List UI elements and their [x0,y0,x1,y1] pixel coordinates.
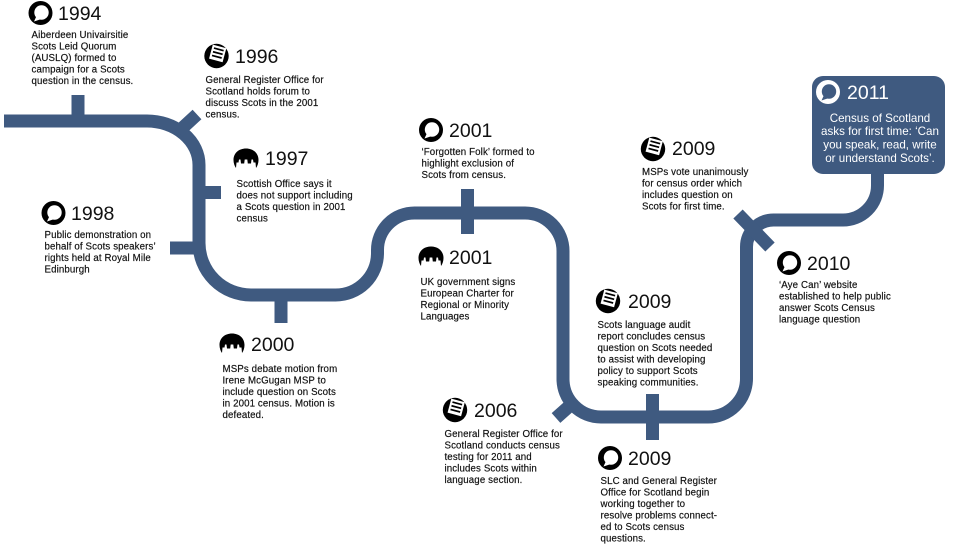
event 2009 SLC: 2009 [628,448,671,470]
event 2000: MSPs debate motion from [222,364,337,375]
icon: crowd 2001 [418,246,444,266]
event 2009 vote: includes question on [642,190,733,201]
event 2010 [777,251,891,326]
event 1996: 1996 [235,46,278,68]
event 2009 audit: speaking communities. [598,378,699,388]
event 2009 SLC: working together to [600,499,685,510]
event 2006: language section. [444,475,522,486]
event 2006: Scotland conducts census [444,440,560,452]
event 1997: census [236,214,268,224]
event 2000: defeated. [222,410,264,421]
icon: speech bubble 1998 [42,201,66,225]
timeline path [4,95,878,440]
event 2001 European Charter: European Charter for [420,288,515,300]
event 1998: behalf of Scots speakers’ [44,242,156,252]
icon: crowd 1997 [234,148,258,168]
event 1997: a Scots question in 2001 [236,202,345,213]
event 1998 [42,201,156,276]
event 2009 audit: Scots language audit [598,320,691,331]
event 1998: Public demonstration on [44,230,151,241]
event 2000 [220,334,337,421]
event 2009 SLC: resolve problems connect- [600,510,717,522]
event 1997: Scottish Office says it [236,179,332,190]
event 1994 [28,1,133,87]
icon: document 2009 audit [596,289,620,313]
event 2006: testing for 2011 and [444,452,532,463]
event 2009 SLC: ed to Scots census [600,522,685,533]
event 1998: Edinburgh [44,264,90,276]
event 2009 vote [641,137,748,212]
event 2006: General Register Office for [444,429,563,440]
event 2009 SLC: questions. [600,534,646,544]
event 2000: Irene McGugan MSP to [222,376,326,386]
event 2009 audit: policy to support Scots [598,366,698,377]
event 2010: established to help public [779,292,891,302]
event 1994: campaign for a Scots [32,64,125,76]
event 2001 Forgotten Folk: 2001 [449,120,492,142]
event 2010: ‘Aye Can’ website [779,280,858,291]
event 1994: 1994 [58,3,102,25]
event 2009 vote: 2009 [672,138,715,160]
event 2010: language question [779,314,860,326]
event 2009 audit: question on Scots needed [598,343,712,354]
event 2009 audit: 2009 [628,291,671,313]
event 2001 European Charter: UK government signs [420,277,515,288]
panel: event 2011 highlight box: asks for first time: ‘Can [821,125,939,138]
event 1996 [204,44,324,120]
event 2009 audit [596,289,712,388]
event 1997 [234,148,353,224]
event 2001 Forgotten Folk: ‘Forgotten Folk’ formed to [422,147,535,158]
event 2001 European Charter: Languages [420,312,470,322]
event 2000: in 2001 census. Motion is [222,398,335,410]
panel: event 2011 highlight box: or understand Scots’. [825,152,935,165]
event 1996: discuss Scots in the 2001 [206,98,318,109]
event 2009 audit: report concludes census [598,332,705,342]
icon: speech bubble 2011 [816,80,840,104]
panel: event 2011 highlight box: you speak, read, write [823,138,937,152]
event 1996: General Register Office for [206,75,324,86]
event 1996: census. [206,110,240,120]
panel: event 2011 highlight box: Census of Scotland [830,112,930,125]
event 1998: 1998 [71,203,114,225]
event 2009 SLC: Office for Scotland begin [600,488,709,498]
event 2001 European Charter [418,246,515,322]
icon: speech bubble 2009 [598,446,622,470]
event 2009 SLC [598,446,718,544]
panel: event 2011 highlight box: 2011 [847,82,889,104]
event 1996: Scotland holds forum to [206,86,310,98]
event 2006: 2006 [474,400,517,422]
event 1994: Aiberdeen Univairsitie [32,30,128,41]
panel: event 2011 highlight box [812,76,945,174]
event 2001 Forgotten Folk: Scots from census. [422,170,506,181]
icon: document 1996 [204,44,229,68]
event 1994: question in the census. [32,76,133,87]
event 2006: includes Scots within [444,464,537,474]
icon: document 2006 [443,398,467,422]
icon: document 2009 vote [641,137,665,161]
event 2001 European Charter: 2001 [449,247,492,269]
icon: speech bubble 2010 [777,251,801,275]
event 2001 Forgotten Folk [419,118,535,181]
icon: crowd 2000 [220,334,244,353]
event 2001 Forgotten Folk: highlight exclusion of [422,158,514,170]
event 2001 European Charter: Regional or Minority [420,300,509,311]
event 1998: rights held at Royal Mile [44,253,151,264]
event 2009 SLC: SLC and General Register [600,476,718,487]
event 2010: answer Scots Census [779,303,875,314]
event 2009 vote: MSPs vote unanimously [642,167,748,178]
event 1994: (AUSLQ) formed to [32,53,116,64]
event 2009 audit: to assist with developing [598,354,706,366]
event 2009 vote: for census order which [642,178,742,190]
icon: speech bubble 2001 [419,118,443,142]
event 1997: does not support including [236,190,353,202]
event 1997: 1997 [265,148,308,170]
event 2009 vote: Scots for first time. [642,202,725,212]
event 2000: include question on Scots [222,387,336,398]
event 2006 [443,398,563,486]
event 2000: 2000 [251,334,295,356]
event 2010: 2010 [807,253,851,275]
icon: speech bubble 1994 [28,1,52,25]
event 1994: Scots Leid Quorum [32,42,116,52]
